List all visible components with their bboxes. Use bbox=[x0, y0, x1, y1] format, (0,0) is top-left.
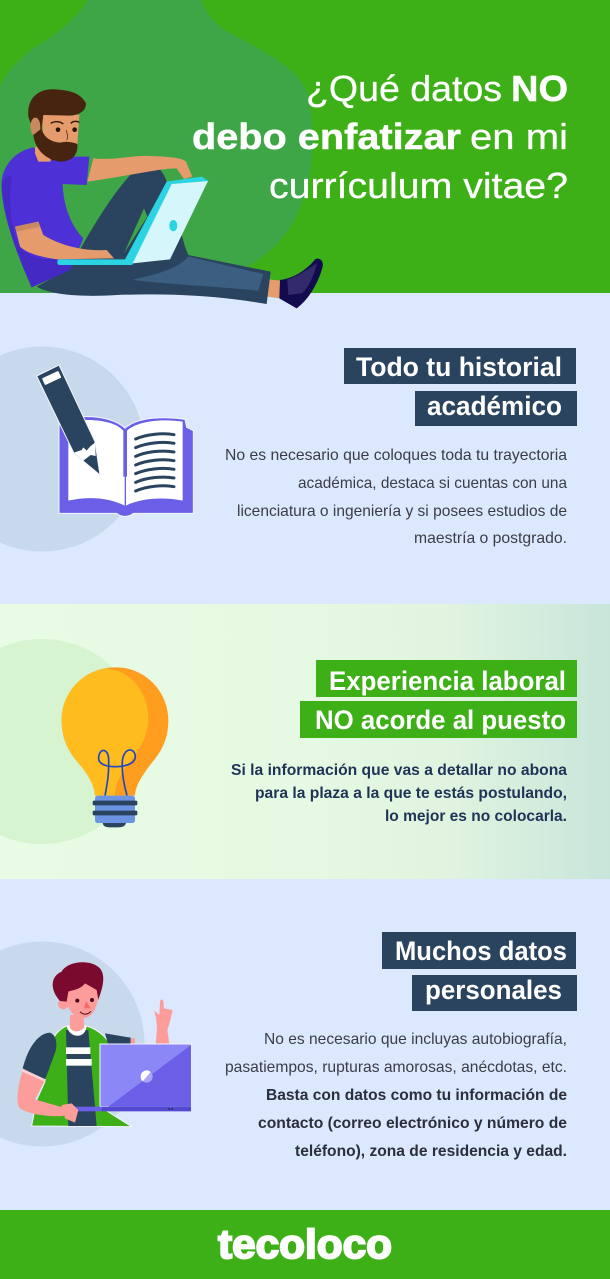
body text bbox=[231, 762, 567, 825]
icon circle bbox=[0, 346, 144, 552]
icon circle bbox=[0, 639, 144, 844]
panel: work experience bbox=[0, 604, 610, 879]
man's trousers bbox=[37, 163, 271, 304]
icon: book and pencil bbox=[37, 365, 193, 516]
icon: person with laptop bbox=[18, 962, 191, 1127]
title: en mi bbox=[470, 116, 568, 157]
body text bbox=[225, 447, 567, 547]
body text: maestría o postgrado. bbox=[414, 530, 567, 547]
heading box: Muchos datos bbox=[395, 936, 567, 966]
heading box: Experiencia laboral bbox=[329, 666, 566, 696]
heading box: Todo tu historial bbox=[356, 352, 562, 382]
man's lower arm bbox=[15, 222, 114, 259]
body text: académica, destaca si cuentas con una bbox=[298, 475, 567, 492]
panel: academic history bbox=[0, 346, 577, 552]
heading box: NO acorde al puesto bbox=[315, 705, 566, 735]
title: debo enfatizar bbox=[192, 116, 461, 157]
man's upper arm bbox=[87, 156, 192, 182]
icon: light bulb bbox=[62, 667, 168, 827]
heading box bbox=[300, 660, 577, 738]
title: currículum vitae? bbox=[269, 165, 568, 206]
body text: No es necesario que incluyas autobiografía, bbox=[264, 1031, 567, 1048]
footer bbox=[0, 1210, 610, 1279]
panel: personal data bbox=[0, 879, 610, 1210]
logo: tecoloco: tecoloco bbox=[218, 1221, 392, 1267]
title: NO bbox=[511, 68, 568, 109]
man's foot and shoe bbox=[267, 259, 323, 308]
heading box: académico bbox=[427, 391, 562, 421]
laptop bbox=[57, 177, 209, 265]
body text: Basta con datos como tu información de bbox=[266, 1087, 567, 1104]
body text: Si la información que vas a detallar no abona bbox=[231, 762, 567, 779]
body text: lo mejor es no colocarla. bbox=[385, 808, 567, 825]
panel: header bbox=[0, 0, 610, 293]
man's shirt bbox=[2, 147, 89, 287]
body text: licenciatura o ingeniería y si posees estudios de bbox=[237, 503, 567, 520]
body text bbox=[225, 1031, 567, 1160]
body text: pasatiempos, rupturas amorosas, anécdotas, etc. bbox=[225, 1059, 567, 1076]
body text: No es necesario que coloques toda tu trayectoria bbox=[225, 447, 567, 464]
icon circle bbox=[0, 942, 144, 1146]
panel: section 1 background bbox=[0, 293, 610, 604]
title bbox=[192, 68, 568, 206]
man's head bbox=[28, 89, 86, 162]
heading box bbox=[344, 348, 577, 426]
title: ¿Qué datos bbox=[306, 68, 502, 109]
illustration: man with laptop bbox=[2, 89, 323, 308]
body text: para la plaza a la que te estás postulando, bbox=[255, 785, 567, 802]
body text: contacto (correo electrónico y número de bbox=[258, 1115, 567, 1132]
body text: teléfono), zona de residencia y edad. bbox=[295, 1143, 567, 1160]
heading box: personales bbox=[425, 975, 562, 1005]
decorative blob behind man bbox=[0, 0, 313, 293]
heading box bbox=[382, 932, 577, 1011]
